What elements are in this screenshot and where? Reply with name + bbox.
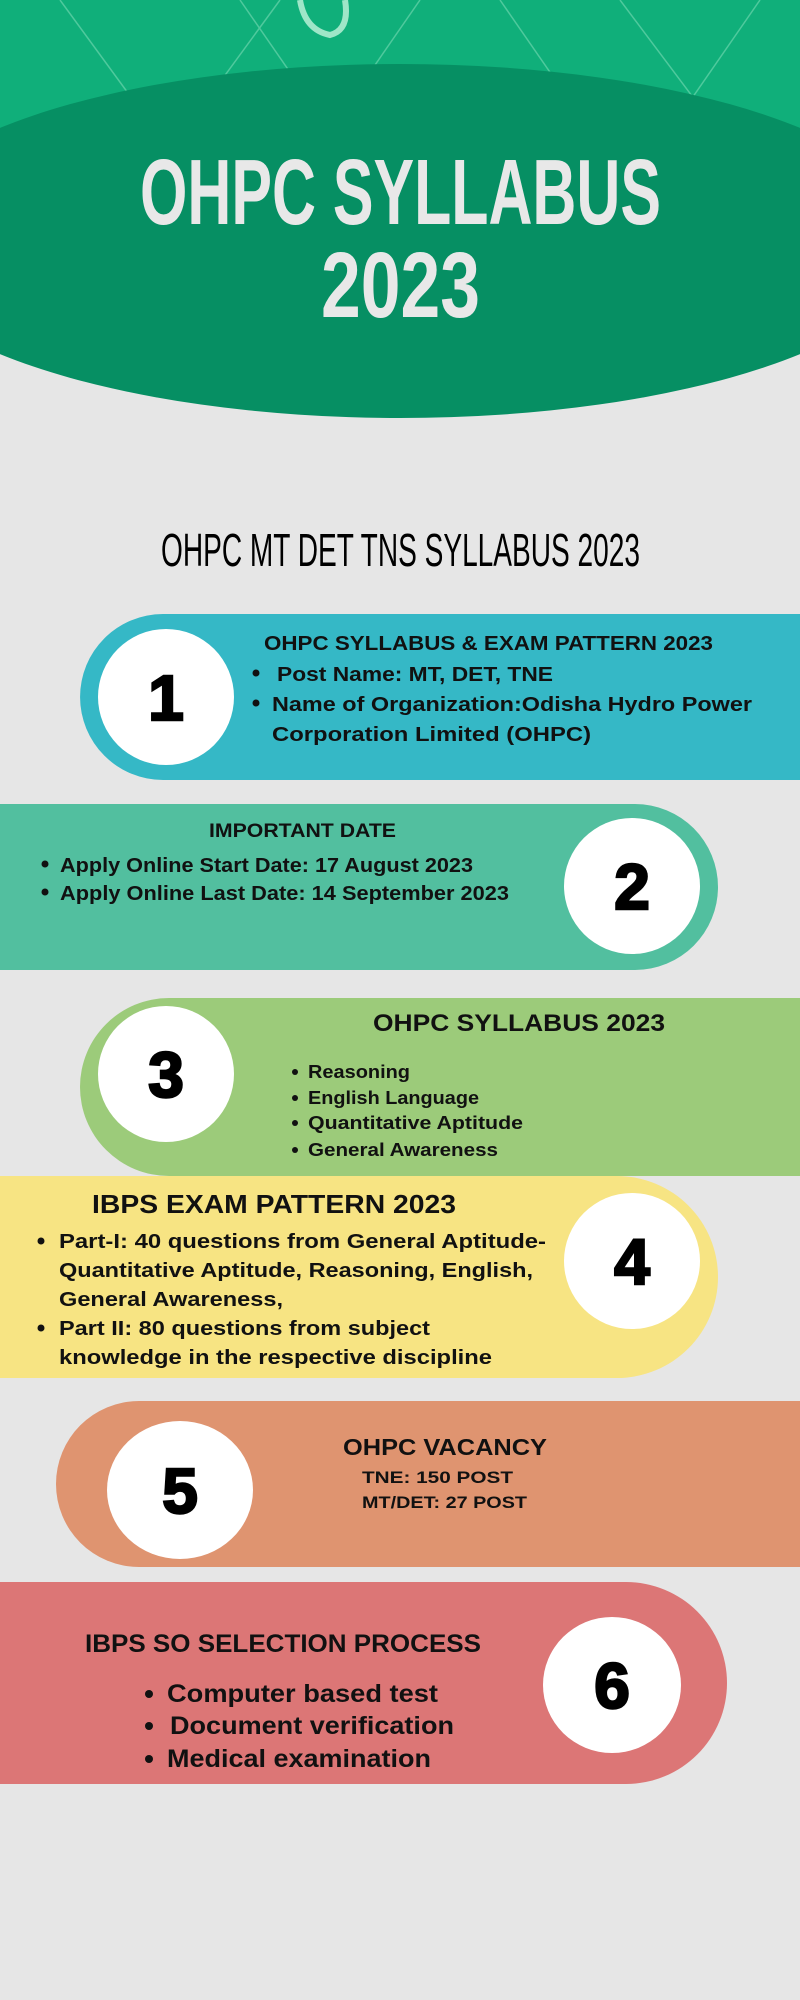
text block 3: OHPC SYLLABUS 2023: [373, 1010, 665, 1037]
title: [140, 140, 661, 337]
text block 4: Quantitative Aptitude, Reasoning, English,: [59, 1260, 533, 1282]
header background: [0, 0, 800, 260]
text block 2: Apply Online Start Date: 17 August 2023: [60, 855, 473, 877]
text block 4: Part-I: 40 questions from General Aptitude-: [59, 1231, 546, 1253]
text block 1: Post Name: MT, DET, TNE: [277, 664, 553, 686]
text block 1: Name of Organization:Odisha Hydro Power: [272, 694, 752, 716]
text block 3: [292, 1010, 665, 1160]
icon: number 1: 1: [148, 662, 184, 734]
panel 4: exam pattern: [0, 1176, 718, 1378]
header ellipse: [0, 64, 800, 418]
icon: number 1: [98, 629, 234, 765]
text block 4: knowledge in the respective discipline: [59, 1347, 492, 1369]
text block 4: General Awareness,: [59, 1289, 283, 1311]
icon: number 2: 2: [614, 851, 650, 923]
panel 6: selection process: [0, 1582, 727, 1784]
icon: number 4: 4: [614, 1226, 650, 1298]
panel 5: vacancy: [56, 1401, 800, 1567]
text block 4: [38, 1189, 546, 1369]
text block 1: OHPC SYLLABUS & EXAM PATTERN 2023: [264, 633, 713, 655]
title: 2023: [321, 233, 480, 337]
text block 3: General Awareness: [308, 1140, 498, 1160]
text block 5: TNE: 150 POST: [362, 1468, 514, 1487]
icon: number 6: 6: [594, 1650, 630, 1722]
text block 1: Corporation Limited (OHPC): [272, 724, 591, 746]
text block 6: Document verification: [170, 1712, 454, 1740]
panel 2: important date: [0, 804, 718, 970]
text block 2: Apply Online Last Date: 14 September 2023: [60, 883, 509, 905]
text block 2: [42, 821, 509, 905]
icon: number 3: [98, 1006, 234, 1142]
text block 6: IBPS SO SELECTION PROCESS: [85, 1630, 481, 1658]
text block 1: [252, 633, 752, 746]
text block 3: Reasoning: [308, 1062, 410, 1082]
text block 5: MT/DET: 27 POST: [362, 1493, 528, 1512]
icon: number 2: [564, 818, 700, 954]
icon: number 3: 3: [148, 1039, 184, 1111]
text block 6: Medical examination: [167, 1745, 431, 1773]
icon: number 6: [543, 1617, 681, 1753]
text block 3: Quantitative Aptitude: [308, 1113, 523, 1133]
text block 4: Part II: 80 questions from subject: [59, 1318, 430, 1340]
text block 6: Computer based test: [167, 1680, 439, 1708]
panel 1: exam pattern: [80, 614, 800, 780]
icon: number 4: [564, 1193, 700, 1329]
text block 4: IBPS EXAM PATTERN 2023: [92, 1189, 456, 1219]
text block 3: English Language: [308, 1088, 479, 1108]
text block 2: IMPORTANT DATE: [209, 821, 396, 842]
text block 6: [85, 1630, 481, 1773]
icon: number 5: 5: [162, 1455, 198, 1527]
text block 5: [343, 1434, 547, 1512]
icon: number 5: [107, 1421, 253, 1559]
panel 3: syllabus: [80, 998, 800, 1176]
text block 5: OHPC VACANCY: [343, 1434, 547, 1460]
